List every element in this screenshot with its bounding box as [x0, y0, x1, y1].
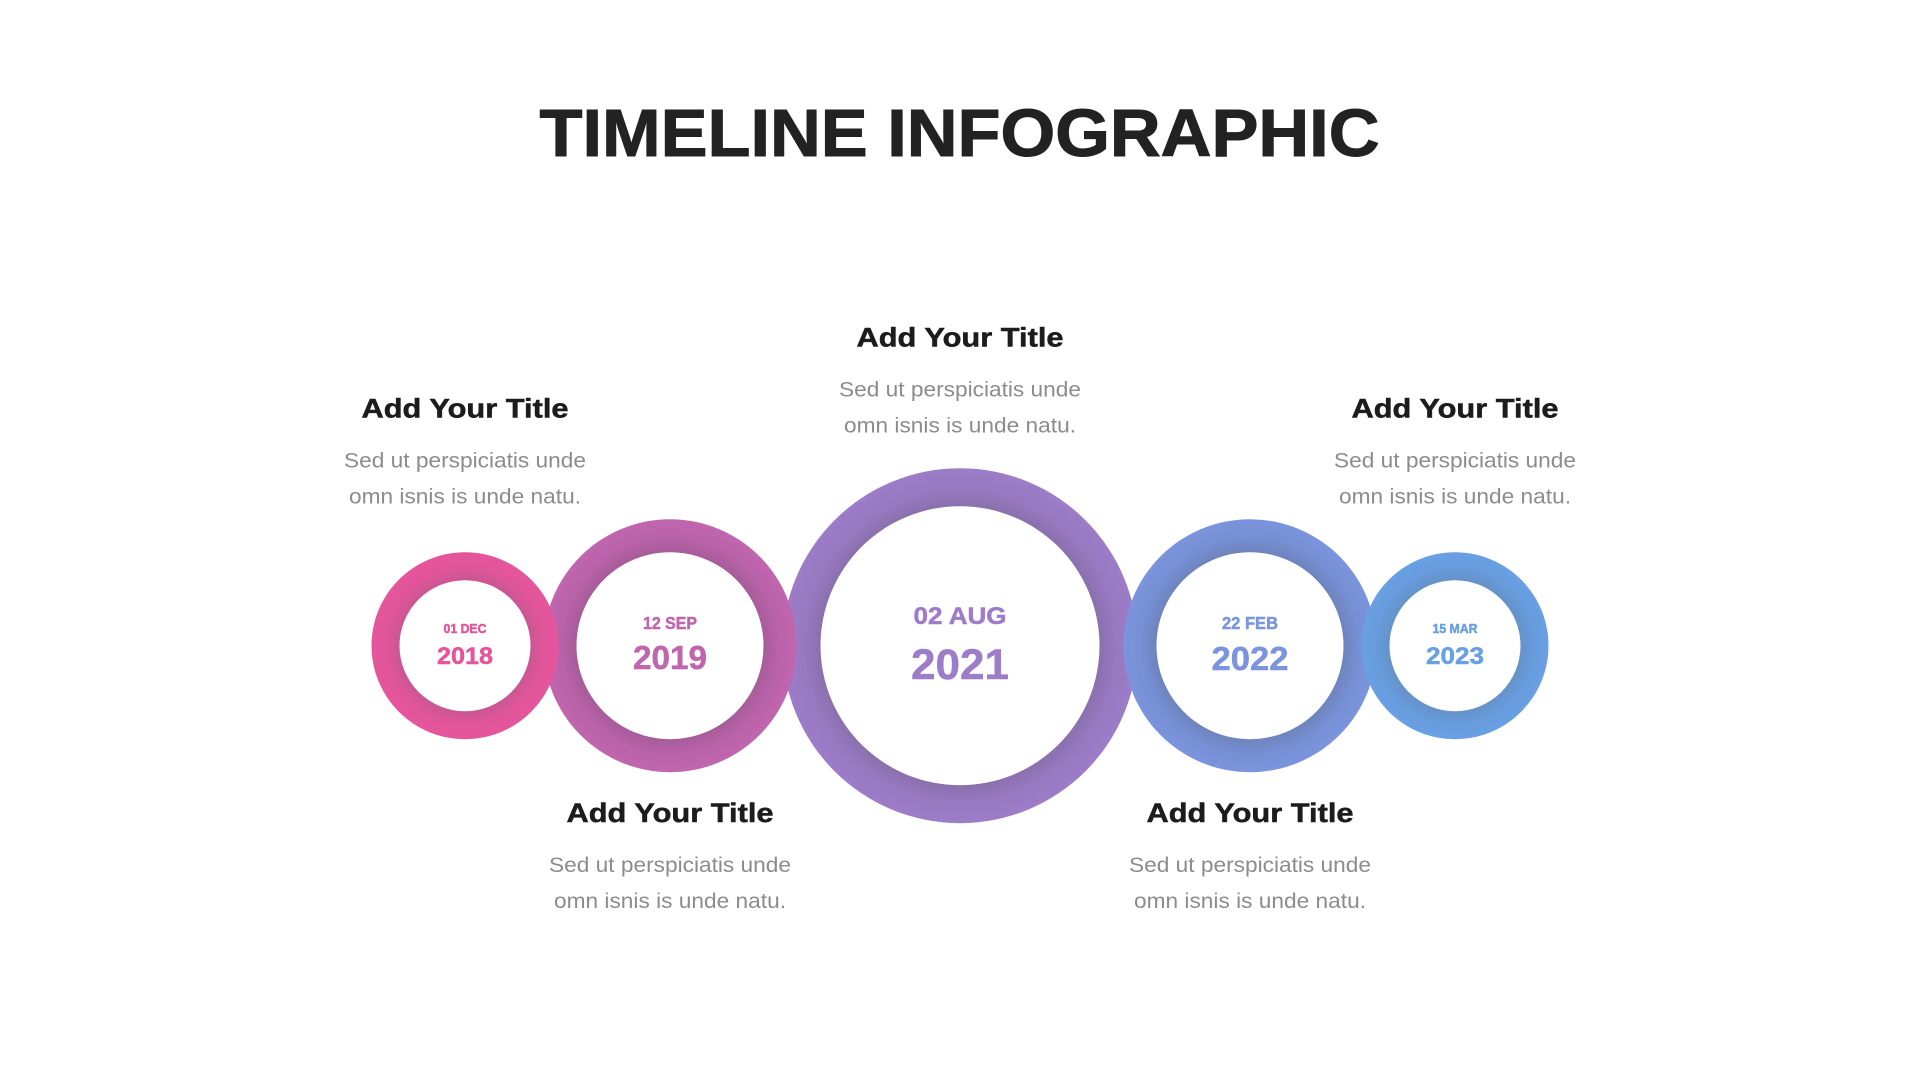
text block: 2019: omn isnis is unde natu. [554, 890, 786, 913]
text block: 2018: Add Your Title [362, 394, 568, 424]
milestone: 15 MAR 2023 ring: 15 MAR [1432, 621, 1478, 636]
text block: 2019 [549, 798, 791, 913]
text block: 2021: omn isnis is unde natu. [844, 414, 1076, 438]
text block: 2022: omn isnis is unde natu. [1134, 890, 1366, 913]
milestone: 02 AUG 2021 center ring: 2021 [911, 641, 1009, 689]
text block: 2021 [839, 322, 1081, 438]
milestone: 22 FEB 2022 ring: 2022 [1212, 640, 1288, 677]
title: TIMELINE INFOGRAPHIC [540, 96, 1380, 171]
text block: 2021: Add Your Title [856, 322, 1064, 352]
text block: 2019: Add Your Title [566, 798, 774, 828]
text block: 2019: Sed ut perspiciatis unde [549, 854, 791, 877]
text block: 2022: Add Your Title [1146, 798, 1354, 828]
text block: 2021: Sed ut perspiciatis unde [839, 378, 1081, 402]
milestone: 12 SEP 2019 ring: 12 SEP [643, 613, 697, 633]
milestone: 01 DEC 2018 ring: 01 DEC [444, 621, 487, 636]
text block: 2022 [1129, 798, 1371, 913]
milestone: 02 AUG 2021 center ring [782, 468, 1138, 823]
text block: 2023: Sed ut perspiciatis unde [1334, 450, 1576, 472]
text block: 2018: omn isnis is unde natu. [349, 486, 581, 508]
text block: 2018 [344, 394, 586, 508]
text block: 2023 [1334, 394, 1576, 508]
text block: 2023: Add Your Title [1352, 394, 1558, 424]
milestone: 15 MAR 2023 ring: 2023 [1426, 643, 1484, 670]
text block: 2023: omn isnis is unde natu. [1339, 486, 1571, 508]
milestone: 15 MAR 2023 ring [1362, 552, 1548, 739]
text block: 2022: Sed ut perspiciatis unde [1129, 854, 1371, 877]
milestone: 01 DEC 2018 ring [372, 552, 558, 739]
milestone: 01 DEC 2018 ring: 2018 [437, 643, 493, 670]
milestone: 22 FEB 2022 ring [1124, 519, 1376, 772]
milestone: 12 SEP 2019 ring: 2019 [633, 639, 707, 676]
text block: 2018: Sed ut perspiciatis unde [344, 450, 586, 472]
milestone: 22 FEB 2022 ring: 22 FEB [1222, 613, 1278, 633]
milestone: 12 SEP 2019 ring [544, 519, 796, 772]
milestone: 02 AUG 2021 center ring: 02 AUG [914, 603, 1006, 630]
